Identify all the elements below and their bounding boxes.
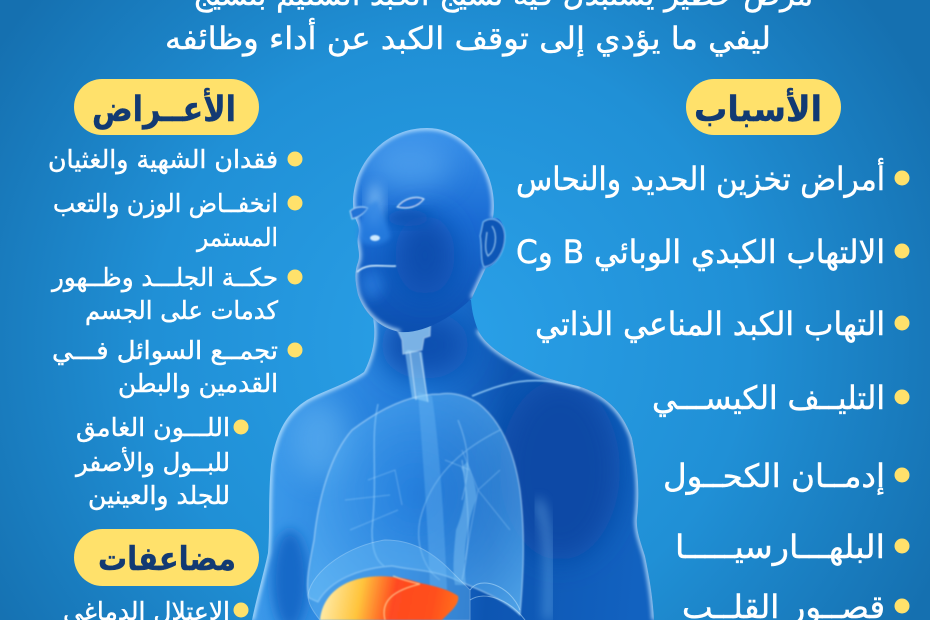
left eye: [350, 207, 368, 219]
causes list: أمراض تخزين الحديد والنحاس: [516, 158, 885, 198]
symptoms list: فقدان الشهية والغثيان: [48, 145, 278, 175]
ear: [480, 219, 505, 267]
panel: complications: [63, 529, 259, 620]
symptoms list: للجلد والعينين: [88, 481, 230, 511]
lungs: [307, 393, 525, 620]
symptoms list: القدمين والبطن: [118, 369, 278, 399]
heading: complications: [74, 529, 259, 586]
heading: causes: [686, 79, 841, 135]
panel: symptoms: [48, 79, 302, 511]
symptoms list: [48, 145, 302, 511]
panel: causes: [516, 79, 910, 620]
causes list: [516, 158, 910, 620]
heading: symptoms: الأعــراض: [92, 87, 236, 130]
liver: [320, 576, 458, 620]
head: [350, 128, 505, 332]
intro paragraph: ليفي ما يؤدي إلى توقف الكبد عن أداء وظائفه: [165, 18, 771, 57]
causes list: التليــف الكيســـي: [652, 379, 885, 417]
heading: complications: مضاعفات: [98, 539, 236, 578]
symptoms list: تجمــع السوائل فـــي: [52, 336, 278, 366]
heading: symptoms: [74, 79, 259, 135]
symptoms list: اللـــون الغامق: [76, 413, 230, 442]
symptoms list: انخفــاض الوزن والتعب: [53, 189, 278, 219]
symptoms list: المستمر: [195, 223, 278, 252]
nose: [358, 200, 390, 245]
heading: causes: الأسباب: [694, 87, 822, 130]
causes list: إدمــان الكحــول: [663, 457, 885, 495]
mouth: [357, 266, 396, 272]
intro paragraph: [165, 0, 813, 57]
symptoms list: كدمات على الجسم: [85, 296, 278, 326]
right eye: [397, 197, 424, 208]
causes list: التهاب الكبد المناعي الذاتي: [535, 305, 885, 343]
causes list: الالتهاب الكبدي الوبائي B وC: [516, 233, 885, 271]
human figure: [252, 128, 654, 620]
symptoms list: للبــول والأصفر: [74, 446, 230, 478]
torso and arms: [252, 290, 654, 620]
causes list: البلهـــارسيـــــا: [675, 528, 885, 566]
windpipe: [394, 303, 447, 590]
symptoms list: حكــة الجلـــد وظــهور: [50, 263, 278, 293]
